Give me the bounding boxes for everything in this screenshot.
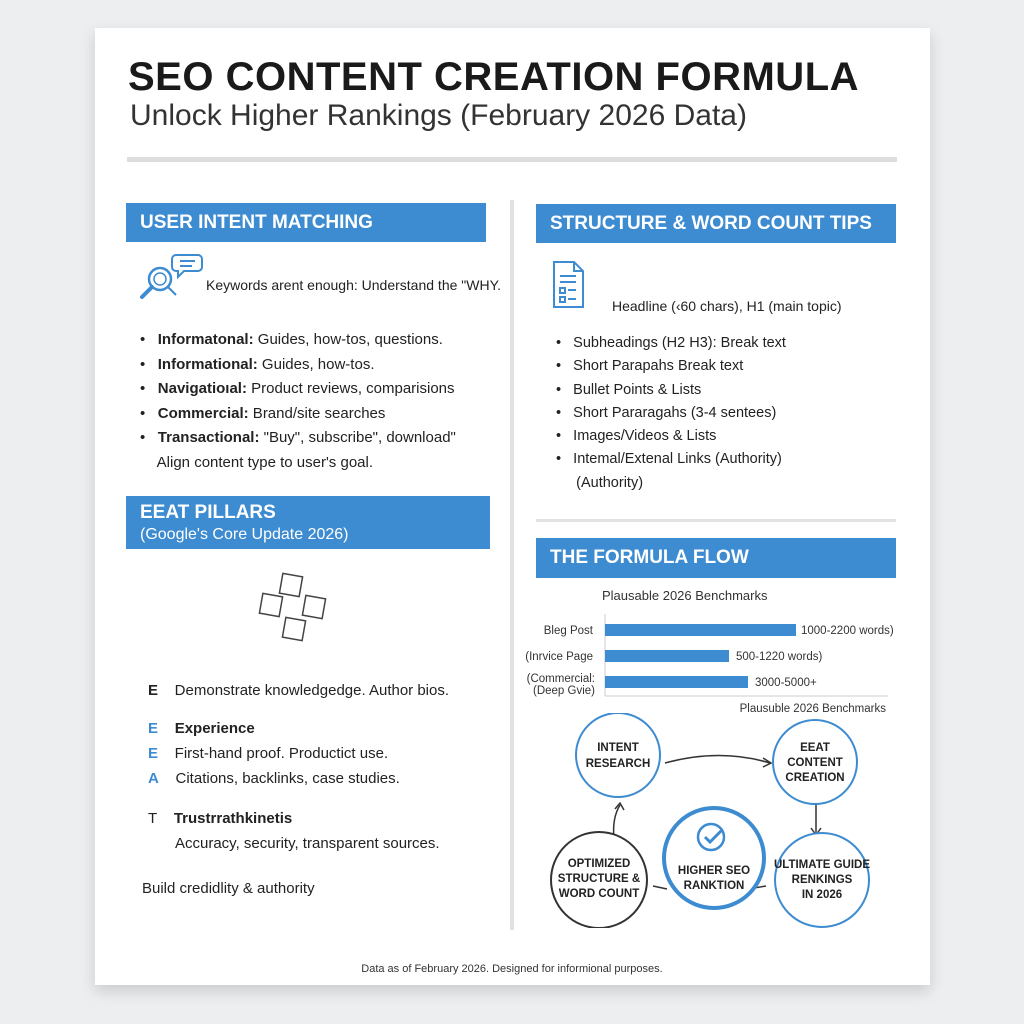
list: pillars: Accuracy, security, transparent sources.	[175, 835, 440, 852]
panel: user intent	[126, 203, 501, 470]
list: tips: • Intemal/Extenal Links (Authority)	[556, 451, 782, 467]
bar chart: (Deep Gvie)	[533, 685, 595, 697]
panel: structure	[536, 204, 896, 491]
bar chart	[525, 588, 894, 715]
flow diagram: WORD COUNT	[559, 888, 639, 900]
card	[95, 28, 930, 985]
flow diagram: STRUCTURE &	[558, 873, 640, 885]
list: intents: Align content type to user's goal.	[157, 454, 373, 470]
bar chart: Plausable 2026 Benchmarks	[602, 588, 768, 603]
heading: formula: THE FORMULA FLOW	[550, 547, 749, 568]
text: intro: Keywords arent enough: Understand the "WHY.	[206, 277, 501, 293]
list: intents: • Navigatioıal: Product reviews, comparisions	[140, 380, 455, 397]
flow diagram: INTENT	[597, 742, 639, 754]
icon: document	[553, 261, 584, 308]
bar chart: 500-1220 words)	[736, 651, 822, 663]
list: tips	[556, 335, 786, 491]
flow diagram: RESEARCH	[586, 758, 650, 770]
list: pillars: A Citations, backlinks, case studies.	[148, 770, 400, 787]
list: intents: • Informatonal: Guides, how-tos, questions.	[140, 331, 443, 348]
bar chart: 1000-2200 words)	[801, 625, 894, 637]
list: tips: • Short Pararagahs (3-4 sentees)	[556, 405, 776, 421]
list: tips: • Images/Videos & Lists	[556, 428, 716, 444]
heading: eeat: EEAT PILLARS	[140, 502, 276, 523]
list: pillars: T Trustrrathkinetis	[148, 810, 292, 827]
list: pillars: E Demonstrate knowledgedge. Author bios.	[148, 682, 449, 699]
heading: eeat: (Google's Core Update 2026)	[140, 526, 349, 543]
flow diagram: CONTENT	[787, 757, 843, 769]
title: SEO CONTENT CREATION FORMULA	[128, 55, 859, 99]
list: tips: • Bullet Points & Lists	[556, 382, 701, 398]
icon: magnifier	[140, 254, 203, 300]
heading: formula	[536, 538, 896, 578]
list: tips: • Short Parapahs Break text	[556, 358, 743, 374]
flow diagram: EEAT	[800, 742, 830, 754]
heading: eeat	[126, 496, 490, 549]
heading: user intent: USER INTENT MATCHING	[140, 212, 373, 233]
bar chart: Bleg Post	[544, 625, 594, 637]
flow diagram: HIGHER SEO	[678, 865, 750, 877]
panel: formula flow	[525, 538, 896, 928]
heading: structure	[536, 204, 896, 243]
list: intents	[140, 331, 456, 470]
flow diagram: RANKTION	[684, 880, 744, 892]
list: intents: • Transactional: "Buy", subscribe", download"	[140, 429, 456, 446]
flow diagram: ULTIMATE GUIDE	[774, 859, 870, 871]
bar chart: Plausuble 2026 Benchmarks	[740, 703, 886, 715]
list: pillars	[148, 682, 449, 852]
list: pillars: E First-hand proof. Productict use.	[148, 745, 388, 762]
list: tips: • Subheadings (H2 H3): Break text	[556, 335, 786, 351]
heading: user intent	[126, 203, 486, 242]
list: intents: • Informational: Guides, how-tos.	[140, 356, 374, 372]
list: tips: (Authority)	[576, 475, 643, 491]
icon: cubes	[258, 572, 326, 642]
text: summary: Build credidlity & authority	[142, 880, 315, 897]
bar chart: 3000-5000+	[755, 677, 817, 689]
flow diagram: CREATION	[785, 772, 845, 784]
heading: structure: STRUCTURE & WORD COUNT TIPS	[550, 213, 872, 234]
flow diagram: IN 2026	[802, 889, 842, 901]
flow diagram: RENKINGS	[792, 874, 853, 886]
text: headline tip: Headline (‹60 chars), H1 (main topic)	[612, 298, 842, 314]
flow diagram: OPTIMIZED	[568, 858, 630, 870]
bar chart: (Inrvice Page	[525, 651, 593, 663]
flow diagram	[550, 713, 870, 928]
panel: eeat	[126, 496, 490, 897]
list: pillars: E Experience	[148, 720, 255, 737]
list: intents: • Commercial: Brand/site searches	[140, 404, 385, 422]
bar chart: (Commercial:	[527, 673, 595, 685]
subtitle: Unlock Higher Rankings (February 2026 Data)	[130, 99, 747, 132]
footer: Data as of February 2026. Designed for informional purposes.	[361, 963, 663, 975]
